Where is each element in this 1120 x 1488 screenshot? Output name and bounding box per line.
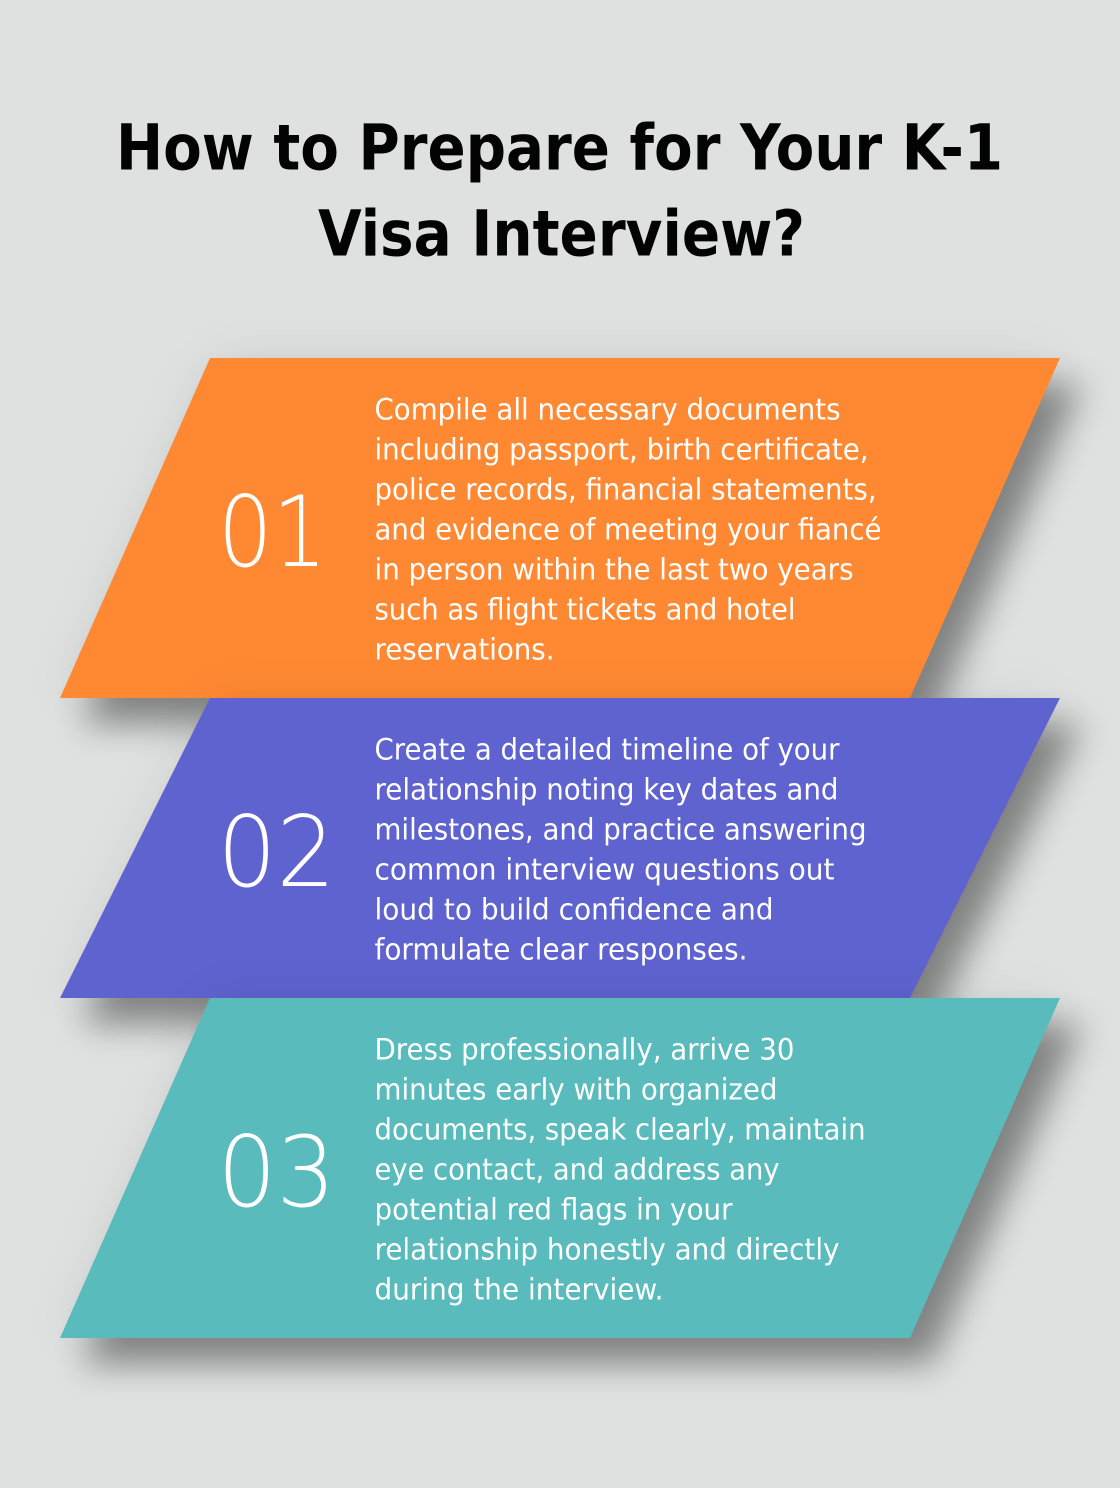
text block: step 03: eye contact, and address any: [374, 1152, 780, 1186]
text block: step 01: in person within the last two years: [374, 552, 854, 586]
text block: step 01: police records, financial statements,: [374, 472, 876, 506]
text block: step 03: relationship honestly and directly: [374, 1232, 840, 1266]
text block: step 02: [374, 732, 866, 966]
title: How to Prepare for Your K-1: [116, 112, 1003, 184]
text block: step 03: potential red flags in your: [374, 1192, 733, 1226]
text block: step 02: common interview questions out: [374, 852, 834, 886]
text block: step 03: documents, speak clearly, maintain: [374, 1112, 866, 1146]
step number 01: 01: [218, 476, 327, 590]
text block: step 02: milestones, and practice answering: [374, 812, 866, 846]
text block: step 01: and evidence of meeting your fiancé: [374, 512, 882, 546]
step number 02: 02: [218, 796, 336, 910]
text block: step 01: Compile all necessary documents: [374, 392, 840, 426]
text block: step 03: [374, 1032, 866, 1306]
text block: step 02: relationship noting key dates and: [374, 772, 838, 806]
text block: step 02: Create a detailed timeline of your: [374, 732, 840, 766]
text block: step 03: Dress professionally, arrive 30: [374, 1032, 794, 1066]
step number 03: 03: [218, 1116, 336, 1230]
text block: step 03: during the interview.: [374, 1272, 664, 1306]
title: Visa Interview?: [318, 198, 805, 270]
panel: step 03: [60, 998, 1082, 1364]
text block: step 03: minutes early with organized: [374, 1072, 778, 1106]
text block: step 01: such as flight tickets and hotel: [374, 592, 796, 626]
text block: step 02: loud to build confidence and: [374, 892, 774, 926]
panel: step 02: [60, 698, 1082, 1024]
text block: step 01: reservations.: [374, 632, 554, 666]
text block: step 01: [374, 392, 882, 666]
text block: step 01: including passport, birth certificate,: [374, 432, 868, 466]
title: [116, 112, 1003, 270]
text block: step 02: formulate clear responses.: [374, 932, 748, 966]
panel: step 01: [60, 358, 1082, 724]
